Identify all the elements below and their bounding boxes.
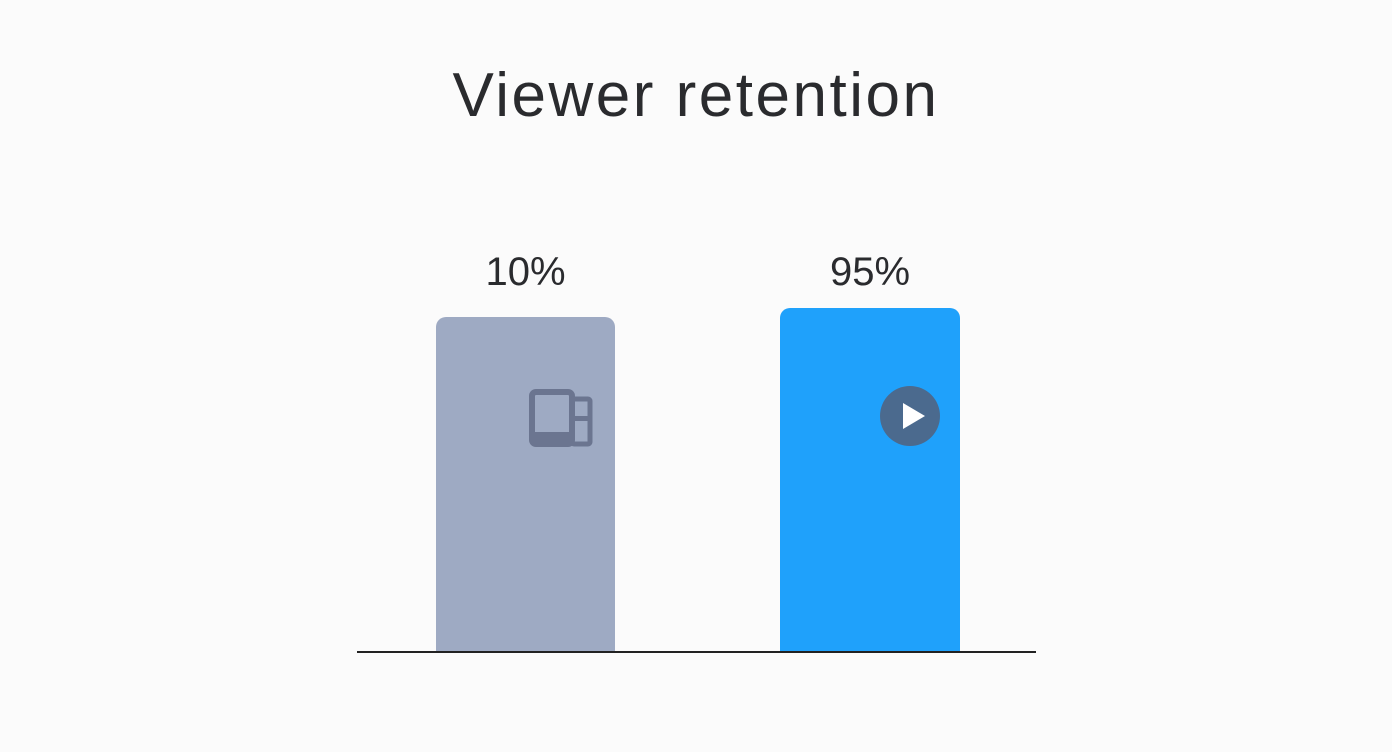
label: 95%: 95% <box>830 250 910 294</box>
icon: play button <box>880 386 940 446</box>
title: Viewer retention <box>453 61 939 130</box>
icon: static image/document <box>529 389 592 447</box>
axis baseline <box>357 651 1036 653</box>
bar: video (95%) <box>780 308 960 653</box>
label: 10%: 10% <box>485 250 566 294</box>
bar: static (10%) <box>436 317 615 653</box>
